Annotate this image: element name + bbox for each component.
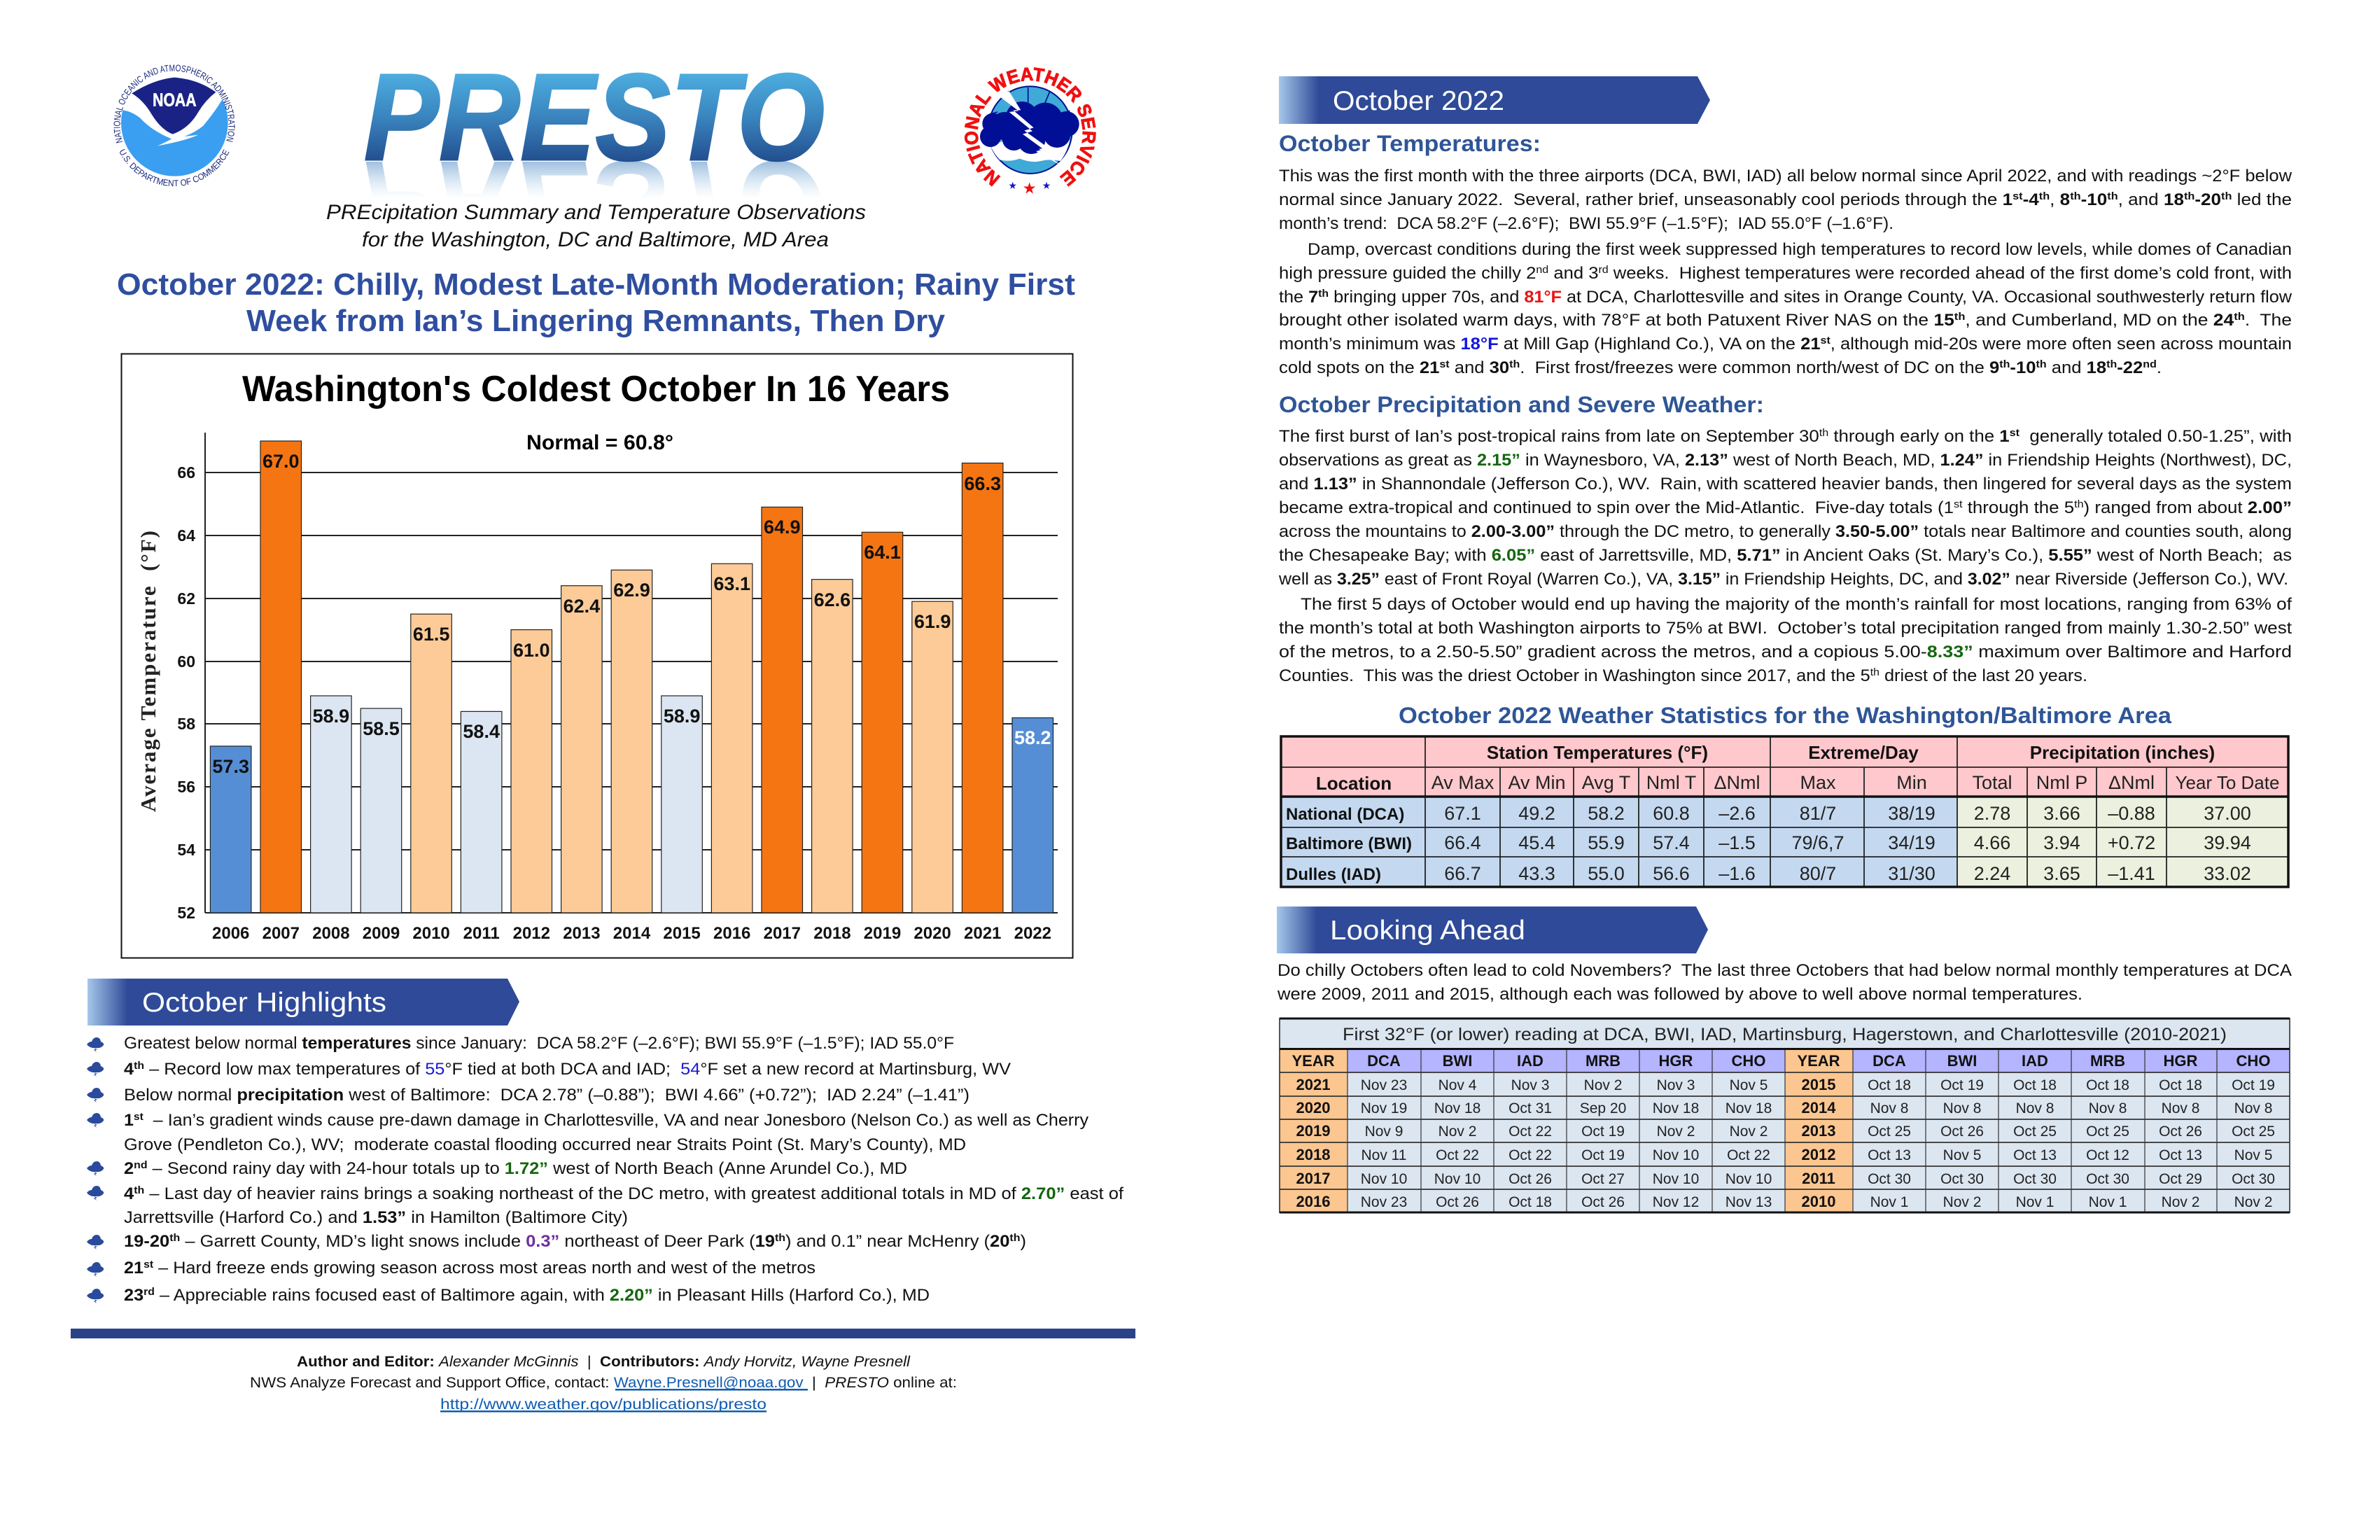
x axis years: 2009 <box>363 924 400 943</box>
row: 2017 and 2011: 2011 <box>1802 1170 1835 1187</box>
text block: precipitation: of the metros, to a 2.50-5.50” gradient across the metros, and a copious 5.00- 8.33” maximum over Baltimore and Harford <box>1279 643 2292 662</box>
text block: precipitation: The first burst of Ian’s post-tropical rains from late on September 30 th through early on the 1st generally totaled 0.50-1.25”, with <box>1279 427 2292 446</box>
row: 2021 and 2015 <box>1296 1076 2275 1093</box>
row: 2020 and 2014 <box>1296 1099 2272 1116</box>
y axis labels: 60 <box>177 652 195 671</box>
x axis years: 2014 <box>613 924 651 943</box>
row: 2018 and 2012: Oct 13 <box>2013 1147 2057 1163</box>
text block: temperatures: This was the first month with the three airports (DCA, BWI, IAD) all below normal since April 2022, and with readings ~2°F below <box>1279 167 2292 186</box>
table header row: YEAR <box>1292 1052 1335 1070</box>
row: 2021 and 2015: Oct 18 <box>1868 1077 1911 1093</box>
logo: PRESTO wordmark <box>364 49 825 272</box>
title: October 2022: Chilly, Modest Late-Month Moderation; Rainy First <box>117 267 1075 302</box>
row: 2019 and 2013: Nov 2 <box>1657 1124 1695 1140</box>
table header row: IAD <box>2022 1052 2048 1070</box>
x axis years <box>212 924 1051 943</box>
text block: temperatures: high pressure guided the chilly 2 nd and 3 rd weeks. Highest temperatures were recorded ahead of the first dome’s cold front, with <box>1279 264 2292 283</box>
row: National (DCA): 67.1 <box>1444 803 1481 824</box>
x axis years: 2013 <box>563 924 601 943</box>
row: Baltimore (BWI) <box>1286 832 2251 853</box>
row: Baltimore (BWI): +0.72 <box>2108 832 2155 853</box>
row: National (DCA): 37.00 <box>2204 803 2251 824</box>
table header row <box>1292 1052 2270 1070</box>
icon: bullet <box>87 1037 104 1052</box>
icon: bullet <box>87 1235 104 1250</box>
bar value labels: 64.1 <box>864 542 901 563</box>
row: Dulles (IAD): 56.6 <box>1653 863 1690 884</box>
logo: NOAA: NATIONAL OCEANIC AND ATMOSPHERIC ADMINISTRATION <box>113 64 235 144</box>
bar value labels: 67.0 <box>262 451 300 472</box>
footer credits: http://www.weather.gov/publications/presto <box>440 1396 766 1413</box>
row: Dulles (IAD): 3.65 <box>2043 863 2080 884</box>
bar value labels: 61.5 <box>413 624 449 645</box>
table header: Min <box>1896 772 1927 793</box>
table header row: MRB <box>2090 1052 2125 1070</box>
row: 2016 and 2010: Nov 2 <box>2162 1194 2199 1210</box>
row: 2020 and 2014: Oct 31 <box>1508 1100 1552 1116</box>
table header row: BWI <box>1443 1052 1472 1070</box>
row: National (DCA): –0.88 <box>2108 803 2155 824</box>
text block: precipitation: well as 3.25” east of Front Royal (Warren Co.), VA, 3.15” in Friendship Heights, DC, and 3.02” near Riverside (Jefferson Co.), WV. <box>1278 570 2288 589</box>
heading band: October 2022 <box>1279 76 1710 124</box>
y axis labels: 62 <box>177 589 195 608</box>
x axis years: 2022 <box>1014 924 1051 943</box>
heading: weather statistics table: October 2022 Weather Statistics for the Washington/Baltimore Area <box>1399 703 2171 728</box>
row: 2019 and 2013: Oct 25 <box>2013 1124 2057 1140</box>
x axis years: 2020 <box>913 924 951 943</box>
row: 2020 and 2014: Nov 18 <box>1726 1100 1772 1116</box>
row: 2021 and 2015: Oct 18 <box>2086 1077 2129 1093</box>
row: 2019 and 2013: 2019 <box>1296 1122 1330 1140</box>
row: Dulles (IAD): Dulles (IAD) <box>1286 865 1381 884</box>
text block: precipitation: observations as great as 2.15” in Waynesboro, VA, 2.13” west of North Beach, MD, 1.24” in Friendship Heights (Northwest), DC, <box>1279 451 2292 470</box>
x axis years: 2012 <box>513 924 550 943</box>
table header row: BWI <box>1947 1052 1977 1070</box>
row: 2017 and 2011: Oct 30 <box>2086 1171 2129 1187</box>
row: 2017 and 2011: Nov 10 <box>1434 1171 1480 1187</box>
x axis years: 2018 <box>813 924 851 943</box>
table header: Year To Date <box>2176 772 2279 793</box>
row: National (DCA): National (DCA) <box>1286 805 1404 824</box>
panel: highlights list <box>87 1034 1124 1305</box>
logo: National Weather Service: NATIONAL WEATHER SERVICE <box>965 67 1096 187</box>
table header: Av Max <box>1432 772 1494 793</box>
bar value labels: 64.9 <box>764 517 801 538</box>
heading band: October 2022: October 2022 <box>1333 86 1504 116</box>
row: 2017 and 2011: Oct 30 <box>2232 1171 2275 1187</box>
row: Baltimore (BWI): –1.5 <box>1718 832 1756 853</box>
row: 2021 and 2015: 2015 <box>1802 1076 1835 1093</box>
row: 2020 and 2014: 2020 <box>1296 1099 1330 1116</box>
highlight text: 4th – Last day of heavier rains brings a soaking northeast of the DC metro, with greatest additional totals in MD of 2.70” east of <box>124 1184 1124 1203</box>
row: 2021 and 2015: Nov 2 <box>1584 1077 1622 1093</box>
x axis years: 2016 <box>713 924 750 943</box>
x axis years: 2019 <box>864 924 901 943</box>
icon: bullet <box>87 1088 104 1102</box>
row: Dulles (IAD): 80/7 <box>1800 863 1836 884</box>
row: 2016 and 2010: Oct 26 <box>1581 1194 1625 1210</box>
row: 2021 and 2015: Oct 18 <box>2013 1077 2057 1093</box>
table header row: MRB <box>1586 1052 1620 1070</box>
y axis labels <box>177 463 195 922</box>
table header: Precipitation (inches) <box>2030 742 2215 763</box>
row: National (DCA) <box>1286 803 2251 824</box>
bar value labels: 62.9 <box>613 580 650 601</box>
row: 2018 and 2012: Nov 5 <box>1943 1147 1981 1163</box>
icon: bullet <box>87 1062 104 1077</box>
row: 2018 and 2012 <box>1296 1146 2272 1163</box>
row: 2018 and 2012: 2012 <box>1802 1146 1835 1163</box>
logo: NOAA <box>113 64 235 186</box>
highlight text: 19-20 th – Garrett County, MD’s light snows include 0.3” northeast of Deer Park ( 19th) and 0.1” near McHenry ( 20th) <box>124 1232 1026 1251</box>
row: National (DCA): 3.66 <box>2043 803 2080 824</box>
logo: PRESTO wordmark: PRESTO <box>364 49 825 186</box>
text block: temperatures: Damp, overcast conditions during the first week suppressed high temperatures to record low levels, while domes of Canadian <box>1308 240 2292 259</box>
row: 2020 and 2014: Nov 8 <box>1943 1100 1981 1116</box>
table header: ΔNml <box>1714 772 1760 793</box>
row: 2018 and 2012: Nov 10 <box>1653 1147 1699 1163</box>
row: National (DCA): 81/7 <box>1800 803 1836 824</box>
text block: temperatures: cold spots on the 21st and 30th. First frost/freezes were common north/west of DC on the 9th-10th and 18th-22nd. <box>1279 358 2162 377</box>
heading band: Looking Ahead <box>1277 906 1708 953</box>
row: 2019 and 2013: Oct 25 <box>2232 1124 2275 1140</box>
text block: temperatures <box>1279 167 2292 377</box>
row: 2019 and 2013: Oct 22 <box>1508 1124 1552 1140</box>
row: 2021 and 2015: Nov 23 <box>1361 1077 1407 1093</box>
row: 2021 and 2015: 2021 <box>1296 1076 1330 1093</box>
row: Dulles (IAD) <box>1286 863 2251 884</box>
text block: precipitation: across the mountains to 2.00-3.00” through the DC metro, to generally 3.50-5.00” totals near Baltimore and counties south, along <box>1279 522 2292 541</box>
icon: bullet <box>87 1161 104 1176</box>
table header row: IAD <box>1517 1052 1544 1070</box>
subtitle <box>326 201 866 251</box>
row: Dulles (IAD): 31/30 <box>1888 863 1935 884</box>
heading band: October Highlights <box>88 979 519 1026</box>
table header: Max <box>1800 772 1836 793</box>
y axis labels: 54 <box>177 841 195 859</box>
row: 2017 and 2011: Oct 30 <box>2013 1171 2057 1187</box>
bar value labels <box>212 451 1051 777</box>
row: Dulles (IAD): –1.41 <box>2108 863 2155 884</box>
row: Baltimore (BWI): 66.4 <box>1444 832 1481 853</box>
row: 2018 and 2012: Oct 22 <box>1436 1147 1479 1163</box>
table header: Total <box>1972 772 2012 793</box>
row: 2016 and 2010: Nov 23 <box>1361 1194 1407 1210</box>
heading: October Temperatures: October Temperatures: <box>1279 131 1541 156</box>
row: National (DCA): 58.2 <box>1588 803 1625 824</box>
row: 2019 and 2013: Nov 9 <box>1365 1124 1403 1140</box>
text block: temperatures: brought other isolated warm days, with 78°F at both Patuxent River NAS on the 15th, and Cumberland, MD on the 24th. The <box>1279 311 2292 330</box>
row: 2018 and 2012: Oct 19 <box>1581 1147 1625 1163</box>
bar value labels: 66.3 <box>964 473 1001 494</box>
row: 2016 and 2010: 2010 <box>1802 1193 1835 1210</box>
highlight text: 2nd – Second rainy day with 24-hour totals up to 1.72” west of North Beach (Anne Arundel Co.), MD <box>124 1159 907 1178</box>
text block: temperatures: the 7th bringing upper 70s, and 81°F at DCA, Charlottesville and sites in Orange County, VA. Occasional southwesterly return flow <box>1279 288 2292 307</box>
row: 2017 and 2011: Oct 26 <box>1508 1171 1552 1187</box>
footer credits: Author and Editor: Alexander McGinnis | Contributors: Andy Horvitz, Wayne Presnell <box>297 1354 911 1370</box>
highlight text: 23rd – Appreciable rains focused east of Baltimore again, with 2.20” in Pleasant Hills (Harford Co.), MD <box>124 1286 930 1305</box>
row: 2021 and 2015: Oct 19 <box>2232 1077 2275 1093</box>
bar value labels: 62.4 <box>564 596 600 617</box>
row: 2019 and 2013: Nov 2 <box>1438 1124 1476 1140</box>
row: 2019 and 2013: Oct 19 <box>1581 1124 1625 1140</box>
row: 2016 and 2010: Nov 13 <box>1726 1194 1772 1210</box>
bar value labels: 57.3 <box>212 756 249 777</box>
row: 2021 and 2015: Nov 4 <box>1438 1077 1477 1093</box>
row: 2016 and 2010: Nov 12 <box>1653 1194 1699 1210</box>
row: 2017 and 2011 <box>1296 1170 2275 1187</box>
row: Dulles (IAD): 55.0 <box>1588 863 1625 884</box>
footer credits: NWS Analyze Forecast and Support Office, contact: Wayne.Presnell@noaa.gov | PRESTO online at: <box>250 1375 957 1391</box>
row: 2020 and 2014: Nov 18 <box>1653 1100 1699 1116</box>
bar value labels: 58.9 <box>313 706 349 727</box>
text block: precipitation: the Chesapeake Bay; with 6.05” east of Jarrettsville, MD, 5.71” in Ancient Oaks (St. Mary’s Co.), 5.55” west of North Beach; as <box>1279 546 2292 565</box>
highlight text: 4th – Record low max temperatures of 55°F tied at both DCA and IAD; 54°F set a new record at Martinsburg, WV <box>124 1060 1011 1079</box>
y axis labels: 64 <box>177 526 195 545</box>
row: Baltimore (BWI): 79/6,7 <box>1791 832 1844 853</box>
row: 2017 and 2011: Oct 27 <box>1581 1171 1625 1187</box>
icon: bullet <box>87 1113 104 1128</box>
row: 2020 and 2014: Nov 8 <box>2234 1100 2272 1116</box>
title <box>117 267 1075 338</box>
row: 2020 and 2014: Nov 8 <box>1870 1100 1908 1116</box>
row: 2021 and 2015: Oct 18 <box>2159 1077 2202 1093</box>
chart title: Washington's Coldest October In 16 Years <box>242 369 950 410</box>
row: 2018 and 2012: Oct 13 <box>1868 1147 1911 1163</box>
row: 2016 and 2010: Nov 1 <box>1870 1194 1908 1210</box>
bar value labels: 58.5 <box>363 718 400 739</box>
logo: NOAA: NOAA <box>153 90 197 111</box>
x axis years: 2011 <box>463 924 500 943</box>
x axis years: 2010 <box>412 924 450 943</box>
row: National (DCA): 49.2 <box>1518 803 1555 824</box>
row: 2016 and 2010 <box>1296 1193 2272 1210</box>
heading: October Precipitation and Severe Weather: October Precipitation and Severe Weather: <box>1279 392 1764 417</box>
row: Dulles (IAD): 2.24 <box>1974 863 2010 884</box>
row: 2021 and 2015: Oct 19 <box>1940 1077 1984 1093</box>
row: Dulles (IAD): 43.3 <box>1518 863 1555 884</box>
row: 2018 and 2012: Oct 12 <box>2086 1147 2129 1163</box>
heading band: Looking Ahead: Looking Ahead <box>1330 916 1525 946</box>
table: first 32F reading <box>1280 1018 2290 1213</box>
y axis labels: 56 <box>177 778 195 796</box>
row: Baltimore (BWI): 39.94 <box>2204 832 2251 853</box>
table header: Av Min <box>1508 772 1566 793</box>
x axis years: 2021 <box>964 924 1001 943</box>
text block: looking ahead <box>1277 961 2292 1004</box>
table header row: DCA <box>1872 1052 1906 1070</box>
y axis labels: 58 <box>177 715 195 733</box>
table: weather statistics <box>1281 736 2288 887</box>
table header: Nml P <box>2036 772 2087 793</box>
table header row: HGR <box>1659 1052 1693 1070</box>
x axis years: 2015 <box>663 924 701 943</box>
text block: looking ahead: Do chilly Octobers often lead to cold Novembers? The last three Octobers that had below normal monthly temperatures at DCA <box>1278 961 2292 980</box>
highlight text: Below normal precipitation west of Baltimore: DCA 2.78” (–0.88”); BWI 4.66” (+0.72”); IAD 2.24” (–1.41”) <box>124 1086 969 1105</box>
row: 2017 and 2011: Nov 10 <box>1361 1171 1407 1187</box>
row: National (DCA): 2.78 <box>1974 803 2010 824</box>
table header row: CHO <box>2236 1052 2270 1070</box>
row: 2017 and 2011: Oct 30 <box>1868 1171 1911 1187</box>
row: Baltimore (BWI): 55.9 <box>1588 832 1625 853</box>
highlight text: 21st – Hard freeze ends growing season across most areas north and west of the metros <box>124 1259 816 1278</box>
row: 2020 and 2014: Nov 19 <box>1361 1100 1407 1116</box>
row: 2017 and 2011: Oct 30 <box>1940 1171 1984 1187</box>
table header row: DCA <box>1367 1052 1401 1070</box>
logo: PRESTO wordmark: PRESTO <box>364 135 825 272</box>
row: Baltimore (BWI): Baltimore (BWI) <box>1286 834 1412 853</box>
row: 2017 and 2011: Nov 10 <box>1653 1171 1699 1187</box>
table header: Location <box>1316 773 1392 794</box>
footer credits <box>250 1354 957 1413</box>
x axis years: 2006 <box>212 924 249 943</box>
bar value labels: 61.9 <box>914 611 951 632</box>
logo: NOAA: U.S. DEPARTMENT OF COMMERCE <box>120 148 230 186</box>
text block: precipitation: Counties. This was the driest October in Washington since 2017, and the 5 th driest of the last 20 years. <box>1279 666 2087 685</box>
x axis years: 2007 <box>262 924 300 943</box>
highlight text <box>124 1111 1088 1154</box>
bar value labels: 63.1 <box>713 573 750 594</box>
table header: Nml T <box>1646 772 1696 793</box>
highlight text: Grove (Pendleton Co.), WV; moderate coastal flooding occurred near Straits Point (St. Mary’s County), MD <box>124 1135 966 1154</box>
bar value labels: 58.2 <box>1014 727 1051 748</box>
row: 2018 and 2012: Nov 11 <box>1362 1147 1406 1163</box>
row: Baltimore (BWI): 4.66 <box>1974 832 2010 853</box>
row: Dulles (IAD): 33.02 <box>2204 863 2251 884</box>
table header row: YEAR <box>1797 1052 1840 1070</box>
row: 2019 and 2013: Oct 25 <box>1868 1124 1911 1140</box>
row: Dulles (IAD): –1.6 <box>1718 863 1756 884</box>
row: 2017 and 2011: 2017 <box>1296 1170 1330 1187</box>
row: National (DCA): 60.8 <box>1653 803 1690 824</box>
y axis title: Average Temperature (°F) <box>136 531 160 812</box>
table header: Avg T <box>1582 772 1630 793</box>
text block: precipitation <box>1278 427 2292 685</box>
row: 2016 and 2010: 2016 <box>1296 1193 1330 1210</box>
bars <box>210 441 1053 913</box>
bar value labels: 58.9 <box>664 706 700 727</box>
text block: temperatures: normal since January 2022. Several, rather brief, unseasonably cool periods through the 1st-4th, 8th-10th, and 18th-20th led the <box>1279 190 2292 209</box>
highlight text: Greatest below normal temperatures since January: DCA 58.2°F (–2.6°F); BWI 55.9°F (–1.5°F); IAD 55.0°F <box>124 1034 954 1053</box>
row: Baltimore (BWI): 34/19 <box>1888 832 1935 853</box>
row: 2016 and 2010: Oct 18 <box>1508 1194 1552 1210</box>
row: 2021 and 2015: Nov 3 <box>1511 1077 1549 1093</box>
row: 2020 and 2014: Nov 18 <box>1434 1100 1480 1116</box>
row: 2020 and 2014: 2014 <box>1802 1099 1836 1116</box>
icon: bullet <box>87 1186 104 1200</box>
row: 2019 and 2013: 2013 <box>1802 1122 1835 1140</box>
row: National (DCA): 38/19 <box>1888 803 1935 824</box>
highlight text: Jarrettsville (Harford Co.) and 1.53” in Hamilton (Baltimore City) <box>124 1208 628 1227</box>
row: 2017 and 2011: Nov 10 <box>1726 1171 1772 1187</box>
y axis labels: 52 <box>177 904 195 922</box>
row: 2018 and 2012: 2018 <box>1296 1146 1330 1163</box>
row: 2017 and 2011: Oct 29 <box>2159 1171 2202 1187</box>
row: 2018 and 2012: Nov 5 <box>2234 1147 2272 1163</box>
bar value labels: 61.0 <box>513 640 550 661</box>
row: 2016 and 2010: Nov 2 <box>2234 1194 2272 1210</box>
heading band: October Highlights: October Highlights <box>142 988 386 1018</box>
y axis labels: 66 <box>177 463 195 482</box>
row: Baltimore (BWI): 45.4 <box>1518 832 1555 853</box>
row: 2019 and 2013: Nov 2 <box>1730 1124 1768 1140</box>
x axis years: 2008 <box>312 924 350 943</box>
title: Week from Ian’s Lingering Remnants, Then Dry <box>246 304 946 338</box>
row: 2019 and 2013 <box>1296 1122 2275 1140</box>
row: 2018 and 2012: Oct 13 <box>2159 1147 2202 1163</box>
text block: temperatures: month’s trend: DCA 58.2°F (–2.6°F); BWI 55.9°F (–1.5°F); IAD 55.0°F (–1.6°F). <box>1279 214 1893 233</box>
text block: precipitation: and 1.13” in Shannondale (Jefferson Co.), WV. Rain, with scattered heavier bands, then lingered for several days as the system <box>1279 475 2292 493</box>
bar chart: Washington's coldest October <box>122 354 1072 958</box>
highlight text: 1st – Ian’s gradient winds cause pre-dawn damage in Charlottesville, VA and near Jonesboro (Nelson Co.) as well as Cherry <box>124 1111 1088 1130</box>
normal annotation: Normal = 60.8° <box>526 431 673 454</box>
table header: ΔNml <box>2108 772 2155 793</box>
table title: First 32°F (or lower) reading at DCA, BWI, IAD, Martinsburg, Hagerstown, and Charlottesville (2010-2021) <box>1343 1025 2227 1044</box>
table header <box>1316 742 2279 794</box>
icon: bullet <box>87 1289 104 1303</box>
table header: Extreme/Day <box>1808 742 1919 763</box>
row: Baltimore (BWI): 57.4 <box>1653 832 1690 853</box>
row: Baltimore (BWI): 3.94 <box>2043 832 2080 853</box>
row: 2021 and 2015: Nov 5 <box>1730 1077 1768 1093</box>
subtitle: PREcipitation Summary and Temperature Observations <box>326 201 866 224</box>
bar value labels: 62.6 <box>814 589 850 610</box>
highlight text <box>124 1184 1124 1227</box>
text block: precipitation: the month’s total at both Washington airports to 75% at BWI. October’s total precipitation ranged from mainly 1.30-2.50” west <box>1279 619 2292 638</box>
subtitle: for the Washington, DC and Baltimore, MD Area <box>362 228 829 251</box>
table header row: CHO <box>1732 1052 1765 1070</box>
row: 2020 and 2014: Nov 8 <box>2162 1100 2199 1116</box>
bar value labels: 58.4 <box>463 721 500 742</box>
row: Dulles (IAD): 66.7 <box>1444 863 1481 884</box>
row: 2016 and 2010: Nov 1 <box>2016 1194 2054 1210</box>
x axis years: 2017 <box>764 924 801 943</box>
row: 2019 and 2013: Oct 25 <box>2086 1124 2129 1140</box>
table header row: HGR <box>2164 1052 2198 1070</box>
row: 2020 and 2014: Nov 8 <box>2089 1100 2127 1116</box>
row: 2018 and 2012: Oct 22 <box>1508 1147 1552 1163</box>
table header: Station Temperatures (°F) <box>1487 742 1708 763</box>
icon: bullet <box>87 1262 104 1277</box>
row: 2019 and 2013: Oct 26 <box>2159 1124 2202 1140</box>
row: 2018 and 2012: Oct 22 <box>1727 1147 1770 1163</box>
row: 2020 and 2014: Sep 20 <box>1580 1100 1626 1116</box>
row: National (DCA): –2.6 <box>1718 803 1756 824</box>
row: 2020 and 2014: Nov 8 <box>2016 1100 2054 1116</box>
row: 2021 and 2015: Nov 3 <box>1657 1077 1695 1093</box>
row: 2016 and 2010: Oct 26 <box>1436 1194 1479 1210</box>
text block: precipitation: The first 5 days of October would end up having the majority of the month’s rainfall for most locations, ranging from 63% of <box>1301 595 2292 614</box>
text block: temperatures: month’s minimum was 18°F at Mill Gap (Highland Co.), VA on the 21st, although mid-20s were more often seen across mountain <box>1279 335 2292 354</box>
row: 2016 and 2010: Nov 2 <box>1943 1194 1981 1210</box>
row: 2016 and 2010: Nov 1 <box>2089 1194 2127 1210</box>
text block: precipitation: became extra-tropical and continued to spin over the Mid-Atlantic. Five-day totals (1 st through the 5 th) ranged from about 2.00” <box>1279 498 2292 517</box>
row: 2019 and 2013: Oct 26 <box>1940 1124 1984 1140</box>
text block: looking ahead: were 2009, 2011 and 2015, although each was followed by above to well above normal temperatures. <box>1277 985 2082 1004</box>
